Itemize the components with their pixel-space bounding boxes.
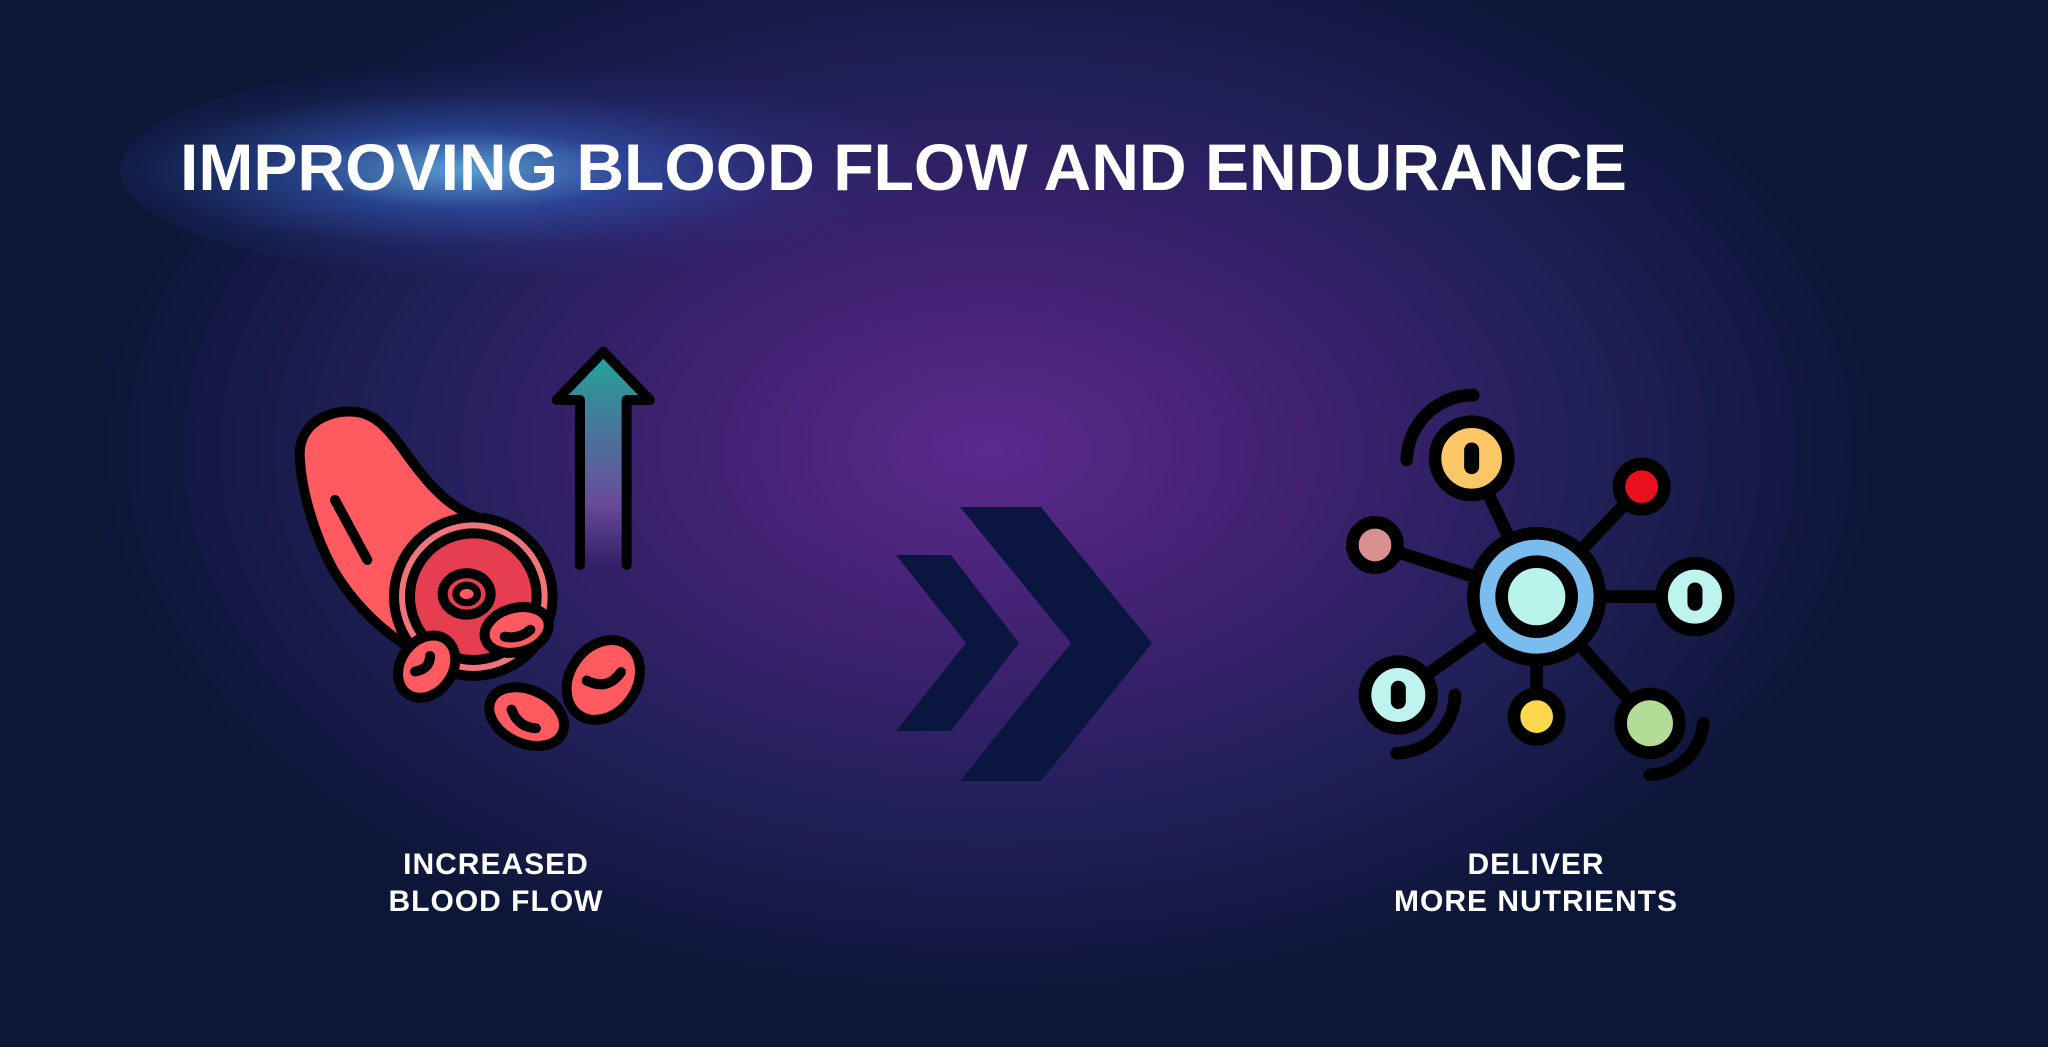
label: deliver more nutrients: DELIVER (1467, 848, 1605, 881)
label: deliver more nutrients: MORE NUTRIENTS (1394, 885, 1678, 918)
title glow (120, 60, 940, 280)
label: deliver more nutrients (1394, 848, 1678, 918)
label: increased blood flow (389, 848, 603, 918)
label: increased blood flow: BLOOD FLOW (389, 885, 603, 918)
title: IMPROVING BLOOD FLOW AND ENDURANCE (180, 130, 1627, 204)
label: increased blood flow: INCREASED (403, 848, 589, 881)
